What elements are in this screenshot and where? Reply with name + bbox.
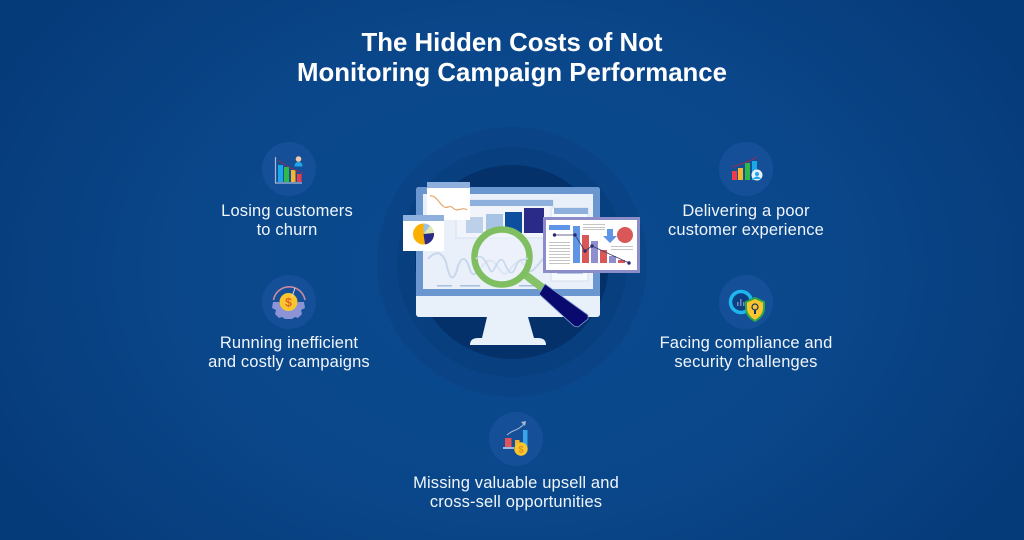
label: upsell: cross-sell opportunities <box>430 493 602 511</box>
icon: poor experience chart <box>719 142 773 196</box>
dashboard: right small panel <box>551 208 588 281</box>
label: upsell: Missing valuable upsell and <box>413 474 619 492</box>
label: poor experience <box>668 202 824 239</box>
label: poor experience: Delivering a poor <box>682 202 810 220</box>
label: losing customers: Losing customers <box>221 202 353 220</box>
title <box>297 29 727 87</box>
icon: upsell chart: $ <box>518 444 524 454</box>
floating pie chart window <box>403 215 444 251</box>
title: Monitoring Campaign Performance <box>297 59 727 87</box>
label: upsell <box>413 474 619 511</box>
monitor <box>416 187 600 345</box>
label: running inefficient: Running inefficient <box>220 334 358 352</box>
icon: customers churn chart <box>262 142 316 196</box>
label: compliance <box>660 334 832 371</box>
label: compliance: Facing compliance and <box>660 334 832 352</box>
dashboard: bar panel <box>456 200 553 238</box>
title: The Hidden Costs of Not <box>362 29 662 57</box>
floating line chart window <box>427 182 470 220</box>
magnifying glass <box>474 230 588 327</box>
icon: costly campaigns gauge: $ <box>285 296 292 310</box>
label: losing customers <box>221 202 353 239</box>
report window with falling bars <box>544 218 638 272</box>
label: running inefficient <box>208 334 370 371</box>
concentric rings behind monitor <box>377 127 647 397</box>
label: compliance: security challenges <box>674 353 818 371</box>
icon: costly campaigns gauge <box>262 275 316 329</box>
label: running inefficient: and costly campaigns <box>208 353 370 371</box>
dashboard: wave line <box>428 253 548 278</box>
label: losing customers: to churn <box>257 221 317 239</box>
icon: upsell chart <box>489 412 543 466</box>
icon: compliance shield <box>719 275 773 329</box>
label: poor experience: customer experience <box>668 221 824 239</box>
